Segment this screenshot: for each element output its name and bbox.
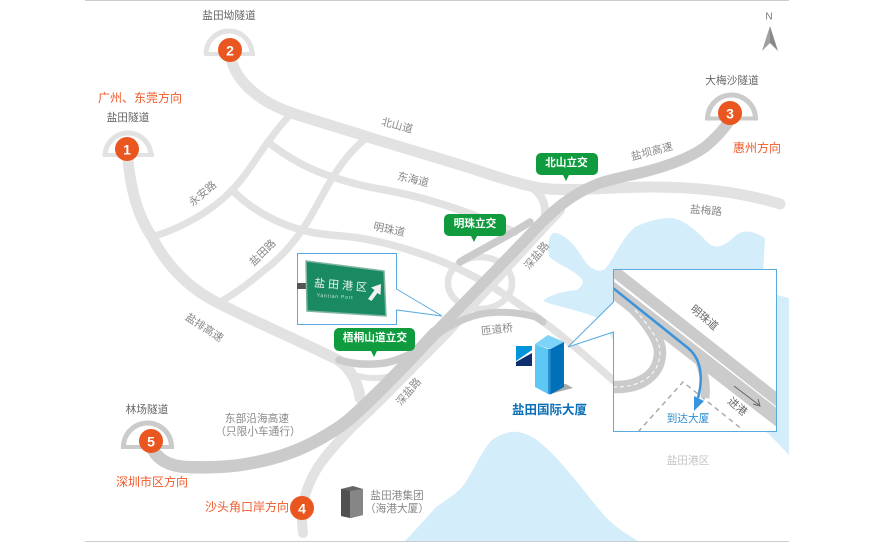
road labels: 东部沿海高速: [225, 412, 289, 425]
inset: lower road: [605, 284, 785, 424]
tunnel 3: [705, 95, 758, 125]
inset: labels: 明珠道: [688, 302, 721, 333]
inset: blue arrowhead: [694, 396, 704, 411]
road: 北山道 and 盐梅路: [231, 58, 780, 204]
road labels: 盐排高速: [183, 310, 226, 345]
inset: blue route: [613, 288, 701, 398]
tag: 北山立交: 北山立交: [545, 156, 588, 169]
direction labels: 惠州方向: [733, 140, 781, 155]
road labels: [183, 115, 723, 467]
compass: [762, 12, 778, 51]
road labels: 盐坝高速: [630, 140, 674, 163]
tag: 明珠立交: [444, 214, 506, 242]
tunnel labels: 盐田坳隧道: [202, 9, 256, 22]
road labels: 匝道桥: [480, 321, 514, 338]
direction labels: 广州、东莞方向: [98, 90, 182, 105]
icon: road sign: 盐田港区: [314, 277, 371, 294]
road labels: 永安路: [186, 178, 219, 209]
direction labels: 深圳市区方向: [116, 474, 188, 489]
tunnel 5: 5: [147, 434, 155, 450]
tunnel 2: [204, 31, 255, 62]
road: 匝道桥: [430, 312, 543, 340]
building label: （海港大厦）: [365, 502, 429, 515]
road labels: 盐田港区: [667, 454, 710, 467]
inset: labels: [667, 302, 749, 425]
water: lower sea: [405, 432, 638, 541]
road: 盐坝高速: [435, 120, 730, 333]
building name: 盐田国际大厦: [512, 402, 587, 417]
tag: 明珠立交: 明珠立交: [454, 217, 497, 230]
water: upper bay: [543, 218, 789, 455]
road: 梧桐山道 ramp: [339, 346, 424, 364]
road labels: （只限小车通行）: [215, 425, 301, 438]
logo: [516, 346, 532, 366]
inset: dashed site outline: [638, 382, 743, 432]
inset: direction arrow: [734, 386, 760, 406]
road: connector: [526, 184, 545, 214]
direction labels: 沙头角口岸方向: [205, 499, 289, 514]
tunnel 1: 1: [123, 142, 131, 158]
icon: road sign: [297, 261, 386, 316]
tunnel labels: 大梅沙隧道: [705, 74, 759, 87]
tag: 北山立交: [536, 153, 598, 181]
tunnel 2: 2: [226, 42, 234, 58]
tag: 梧桐山道立交: 梧桐山道立交: [343, 331, 407, 344]
inset: exit ramp: [688, 345, 705, 398]
sign callout panel: [297, 254, 442, 324]
building: 盐田国际大厦: [535, 335, 573, 394]
building: 盐田港集团: [341, 486, 363, 518]
road: 明珠道: [232, 190, 615, 382]
inset: labels: 到达大厦: [667, 412, 710, 425]
tunnel labels: 盐田隧道: [107, 111, 150, 124]
building label: [365, 489, 429, 515]
compass: N: [765, 12, 773, 22]
junction 4: [290, 496, 314, 520]
road labels: 明珠道: [372, 220, 406, 239]
direction labels: [98, 90, 781, 514]
road labels: 深盐路: [521, 239, 552, 272]
road labels: 盐田路: [247, 236, 279, 269]
inset: upper road: [605, 264, 785, 406]
road labels: 北山道: [380, 115, 415, 136]
inset panel: [568, 264, 785, 432]
tunnel labels: [107, 9, 759, 416]
tunnel 5: [121, 423, 174, 453]
tunnel 3: 3: [726, 106, 734, 122]
road: roundabout: [448, 257, 512, 309]
tag: 梧桐山道立交: [334, 328, 415, 357]
road: 永安路: [152, 113, 292, 237]
tunnel labels: 林场隧道: [126, 403, 169, 416]
road: lower ramp: [358, 373, 400, 378]
road: 深盐路: [302, 210, 560, 533]
road: 东部沿海高速: [153, 333, 435, 467]
inset: labels: 进港: [725, 396, 749, 419]
building label: 盐田港集团: [370, 489, 424, 502]
inset: loop ramp: [613, 292, 660, 387]
road: 东海道: [268, 142, 515, 232]
road labels: 深盐路: [393, 375, 424, 408]
junction 4: 4: [298, 500, 306, 516]
road: 盐排高速: [128, 160, 360, 398]
road labels: 盐梅路: [689, 203, 723, 218]
road labels: 东海道: [396, 170, 430, 190]
tunnel 1: [103, 133, 154, 161]
icon: road sign: Yantian Port: [316, 293, 354, 301]
road: 盐田路: [218, 137, 368, 303]
road: 明珠立交 ramp: [460, 222, 530, 262]
